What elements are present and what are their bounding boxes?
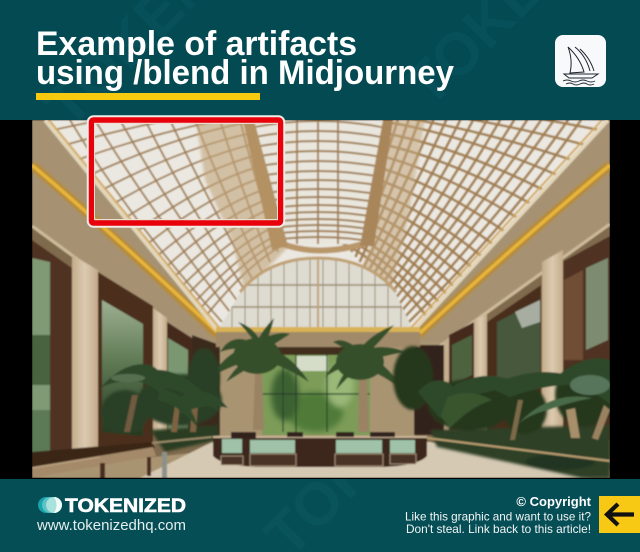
title: using /blend in Midjourney <box>36 54 454 92</box>
logo mark <box>38 497 62 513</box>
right planting bed <box>430 425 610 478</box>
floor <box>140 442 590 478</box>
icon: yellow arrow box <box>599 496 640 533</box>
copyright notice: Don't steal. Link back to this article! <box>406 522 591 536</box>
photo: glass-roofed atrium <box>32 100 615 478</box>
left wall <box>32 161 221 458</box>
arch ribs <box>240 243 396 328</box>
title underline <box>36 93 260 100</box>
palm: centre left <box>211 318 309 430</box>
title <box>36 25 454 92</box>
Tokenized logo <box>38 496 186 517</box>
reception desk <box>213 432 427 467</box>
icon: Midjourney sailboat logo <box>555 35 606 87</box>
logo wordmark: TOKENIZED <box>65 496 186 517</box>
left planting bed <box>150 425 218 452</box>
copyright notice <box>405 494 592 536</box>
tan haze beside right beam <box>362 120 425 290</box>
artifact blur in left roof panel <box>196 120 290 292</box>
title: Example of artifacts <box>36 25 357 63</box>
bench and rail <box>32 437 610 478</box>
copyright notice: © Copyright <box>516 494 592 509</box>
red highlight box <box>90 119 282 224</box>
left roof panel lattice <box>56 120 280 323</box>
right wall <box>413 161 610 470</box>
palms: left group <box>100 348 228 434</box>
skylight glass <box>45 120 608 330</box>
back arched window <box>220 258 411 328</box>
website url: www.tokenizedhq.com <box>36 517 186 534</box>
palm: centre right <box>325 325 405 432</box>
header band <box>0 0 640 120</box>
right roof panel lattice <box>342 120 598 324</box>
palms: right group <box>393 346 615 440</box>
copyright notice: Like this graphic and want to use it? <box>405 510 591 524</box>
centre roof panel <box>254 120 383 246</box>
footer band <box>0 479 640 552</box>
back wall and garden view <box>216 327 420 435</box>
roof beams <box>45 120 608 331</box>
